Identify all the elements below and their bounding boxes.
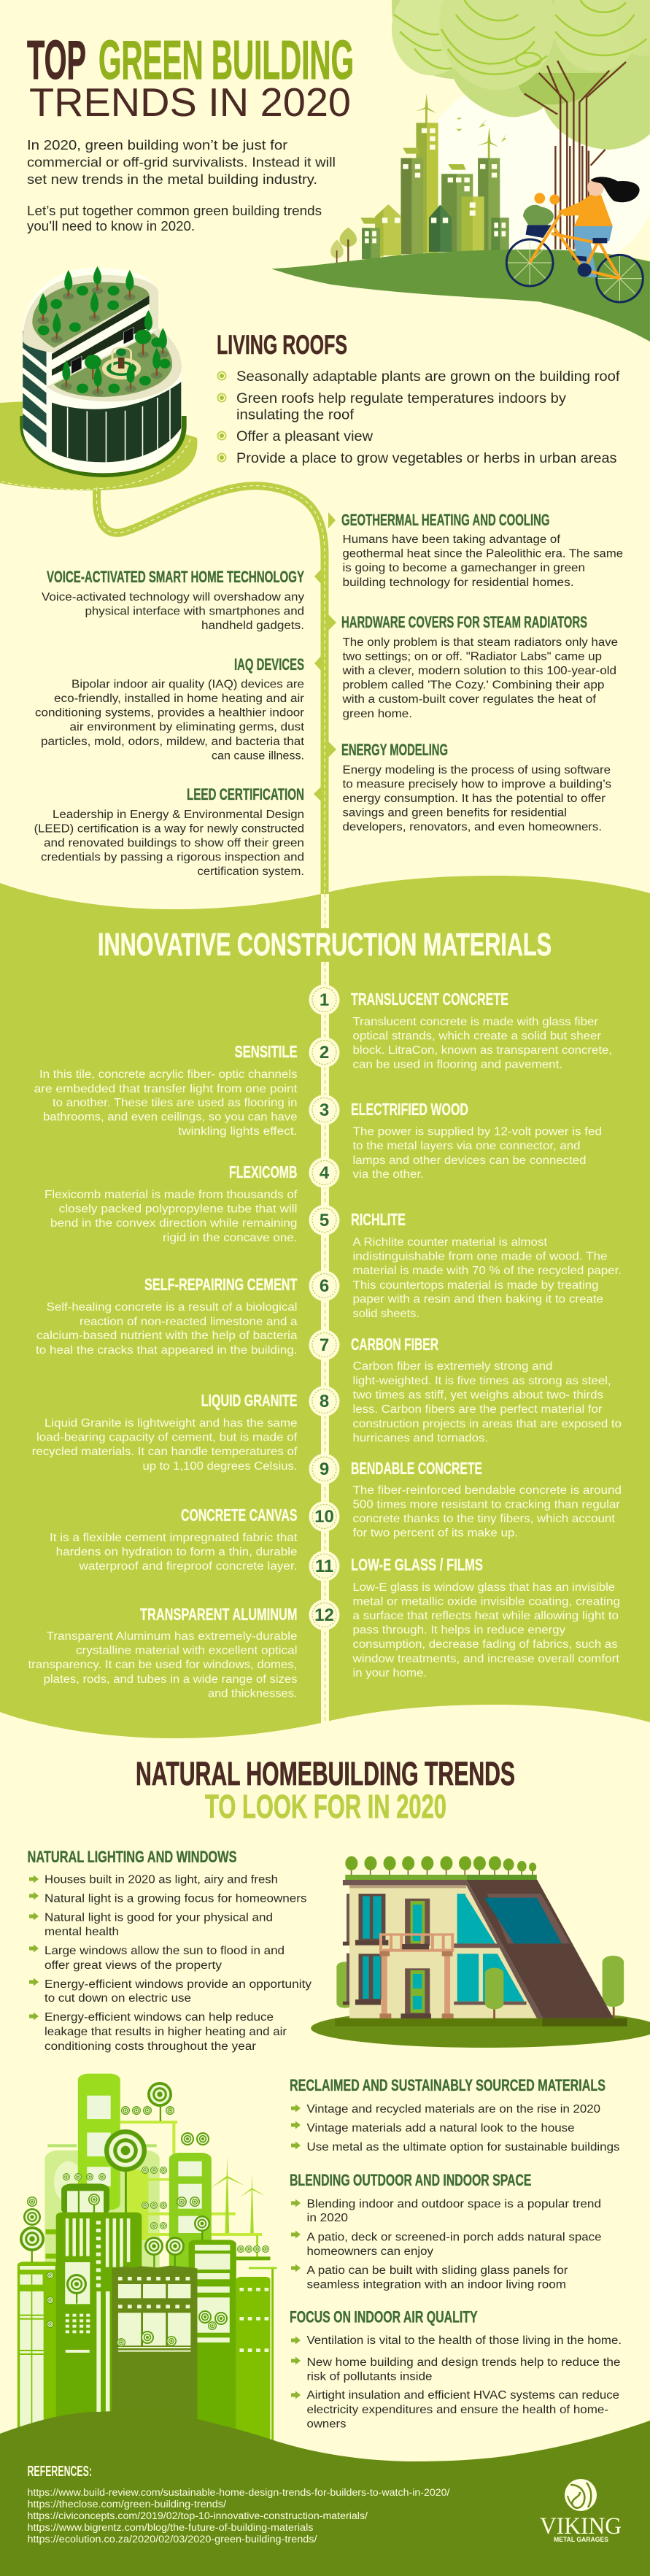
panel: reclaimed and sustainably sourced materials	[290, 2076, 620, 2153]
panel: blending outdoor and indoor space: in 2020	[306, 2212, 348, 2224]
panel: blending outdoor and indoor space: A patio, deck or screened-in porch adds natural space	[306, 2232, 601, 2244]
panel: focus on indoor air quality: electricity expenditures and ensure the health of home-	[306, 2404, 608, 2416]
item: hardware covers for steam radiators: with a clever, modern solution to this 100-year-old	[341, 665, 616, 677]
item: sensitile: twinkling lights effect.	[178, 1125, 298, 1138]
cyclist	[574, 226, 613, 277]
item: richlite	[351, 1210, 622, 1320]
trees and bushes	[37, 288, 169, 396]
panel: natural lighting and windows: Houses built in 2020 as light, airy and fresh	[45, 1874, 278, 1886]
item: self-repairing cement: Self-healing concrete is a result of a biological	[47, 1301, 297, 1314]
road arrow markers	[314, 512, 336, 802]
lower roof	[47, 328, 182, 401]
references: https://ecolution.co.za/2020/02/03/2020-green-building-trends/	[28, 2534, 317, 2545]
item: hardware covers for steam radiators: with a custom-built cover regulates the heat of	[341, 693, 597, 706]
references: https://theclose.com/green-building-trends/	[28, 2499, 226, 2510]
number markers 1-12: 5	[320, 1211, 329, 1230]
item: sensitile: bathrooms, and even ceilings, so you can have	[43, 1111, 298, 1124]
item: low-e glass / films: Low-E glass is window glass that has an invisible	[353, 1581, 615, 1594]
buildings	[416, 123, 427, 253]
item: IAQ devices: Bipolar indoor air quality (IAQ) devices are	[71, 679, 304, 690]
item: hardware covers for steam radiators: The only problem is that steam radiators only have	[343, 636, 618, 649]
item: transparent aluminum: plates, rods, and tubes in a wide range of sizes	[44, 1673, 298, 1686]
panel: natural lighting and windows: to cut down on electric use	[45, 1992, 191, 2005]
tree stems	[31, 2097, 203, 2304]
item: richlite: solid sheets.	[353, 1308, 419, 1320]
bullet list: Seasonally adaptable plants are grown on the building roof	[236, 369, 620, 385]
number markers 1-12: 7	[320, 1335, 329, 1355]
panel: blending outdoor and indoor space: Blending indoor and outdoor space is a popular trend	[306, 2198, 601, 2210]
item: voice-activated smart home technology: handheld gadgets.	[201, 620, 304, 632]
panel: focus on indoor air quality: owners	[306, 2418, 347, 2431]
panel: natural lighting and windows: mental health	[45, 1926, 119, 1938]
item: sensitile: SENSITILE	[235, 1042, 298, 1061]
intro text: In 2020, green building won’t be just for	[27, 137, 287, 153]
number markers 1-12: 4	[320, 1163, 330, 1183]
item: LEED certification: certification system.	[197, 865, 304, 878]
references: https://www.bigrentz.com/blog/the-future-of-building-materials	[28, 2522, 314, 2533]
item: IAQ devices: IAQ DEVICES	[234, 655, 304, 674]
item: transparent aluminum: and thicknesses.	[208, 1687, 298, 1700]
item: low-e glass / films: a surface that reflects heat while allowing light to	[353, 1610, 619, 1622]
bullet list: insulating the roof	[236, 407, 355, 423]
item: low-e glass / films: window treatments, and increase overall comfort	[352, 1653, 620, 1665]
item: IAQ devices: eco-friendly, installed in home heating and air	[54, 693, 304, 705]
illustration: building with living roof	[20, 266, 187, 477]
item: voice-activated smart home technology	[42, 568, 304, 632]
fountain	[102, 358, 141, 379]
item: self-repairing cement: calcium-based nutrient with the help of bacteria	[36, 1330, 298, 1342]
item: liquid granite: up to 1,100 degrees Celsius.	[143, 1460, 298, 1473]
item: carbon fiber: hurricanes and tornados.	[353, 1432, 488, 1445]
item: richlite: This countertops material is made by treating	[353, 1279, 598, 1292]
item: geothermal heating and cooling: geothermal heat since the Paleolithic era. The same	[343, 547, 623, 560]
windows	[457, 1894, 465, 1943]
item: LEED certification	[34, 785, 304, 878]
item: concrete canvas: CONCRETE CANVAS	[181, 1505, 298, 1524]
solar panels	[360, 148, 466, 224]
item: translucent concrete: block. LitraCon, known as transparent concrete,	[353, 1044, 612, 1057]
item: liquid granite: recycled materials. It can handle temperatures of	[32, 1446, 298, 1458]
item: richlite: RICHLITE	[351, 1210, 406, 1229]
wind turbines	[415, 93, 499, 159]
panel: focus on indoor air quality: risk of pollutants inside	[306, 2371, 432, 2383]
item: voice-activated smart home technology: Voice-activated technology will overshadow any	[42, 591, 304, 603]
item: IAQ devices: conditioning systems, provides a healthier indoor	[35, 707, 304, 720]
illustration: tree, green city and cyclist	[271, 0, 650, 342]
heading: natural homebuilding trends	[136, 1755, 515, 1825]
item: translucent concrete: TRANSLUCENT CONCRETE	[351, 990, 508, 1009]
references: REFERENCES:	[28, 2464, 92, 2480]
item: carbon fiber: two times as stiff, yet weighs about two- thirds	[353, 1389, 603, 1401]
item: liquid granite: Liquid Granite is lightweight and has the same	[45, 1417, 298, 1430]
item: bendable concrete: 500 times more resistant to cracking than regular	[353, 1499, 620, 1511]
item: electrified wood: ELECTRIFIED WOOD	[351, 1100, 468, 1119]
number markers 1-12: 1	[320, 990, 329, 1010]
panel: blending outdoor and indoor space: A patio can be built with sliding glass panels for	[306, 2264, 568, 2277]
heading: living roofs: LIVING ROOFS	[217, 330, 347, 360]
panel: footer background	[0, 2411, 650, 2576]
item: energy modeling	[341, 741, 611, 833]
number markers 1-12: 10	[314, 1507, 334, 1527]
item: geothermal heating and cooling: Humans have been taking advantage of	[343, 533, 561, 546]
item: self-repairing cement: SELF-REPAIRING CEMENT	[144, 1275, 298, 1294]
number markers 1-12: 6	[320, 1276, 329, 1296]
panel: blending outdoor and indoor space: BLENDING OUTDOOR AND INDOOR SPACE	[290, 2171, 531, 2189]
title: GREEN BUILDING	[98, 29, 354, 90]
item: energy modeling: developers, renovators, and even homeowners.	[343, 821, 602, 833]
panel: focus on indoor air quality: Airtight insulation and efficient HVAC systems can reduce	[306, 2389, 619, 2402]
item: electrified wood: via the other.	[353, 1168, 424, 1181]
wind turbines	[212, 2156, 266, 2257]
item: electrified wood: lamps and other devices can be connected	[353, 1154, 587, 1167]
item: translucent concrete: Translucent concrete is made with glass fiber	[353, 1016, 598, 1028]
item: geothermal heating and cooling: building technology for residential homes.	[343, 576, 573, 589]
number markers 1-12: 9	[320, 1459, 329, 1479]
panel: natural lighting and windows: Large windows allow the sun to flood in and	[45, 1945, 285, 1957]
item: sensitile: to another. These tiles are used as flooring in	[53, 1097, 298, 1109]
item: carbon fiber: CARBON FIBER	[351, 1335, 438, 1354]
item: sensitile: In this tile, concrete acrylic fiber- optic channels	[39, 1068, 298, 1081]
title	[27, 29, 354, 125]
item: flexicomb: FLEXICOMB	[229, 1162, 298, 1181]
item: LEED certification: credentials by passing a rigorous inspection and	[41, 851, 304, 864]
number markers 1-12	[309, 984, 340, 1630]
panel: natural lighting and windows: leakage that results in higher heating and air	[45, 2026, 287, 2038]
item: geothermal heating and cooling: GEOTHERMAL HEATING AND COOLING	[341, 511, 550, 529]
panel: reclaimed and sustainably sourced materials: Use metal as the ultimate option for sustainable buildings	[306, 2141, 620, 2153]
item: IAQ devices: particles, mold, odors, mildew, and bacteria that	[41, 736, 305, 748]
references	[28, 2464, 450, 2545]
references: https://civiconcepts.com/2019/02/top-10-innovative-construction-materials/	[28, 2510, 368, 2521]
panel: living roofs	[217, 330, 620, 466]
item: electrified wood: The power is supplied by 12-volt power is fed	[353, 1126, 602, 1138]
item: concrete canvas	[50, 1505, 298, 1573]
intro text: you’ll need to know in 2020.	[27, 218, 195, 234]
road from building to first section	[0, 401, 325, 894]
item: liquid granite: LIQUID GRANITE	[201, 1391, 298, 1410]
item: bendable concrete: concrete thanks to the tiny fibers, which account	[353, 1513, 616, 1525]
item: flexicomb: rigid in the concave one.	[163, 1232, 298, 1244]
item: bendable concrete	[351, 1459, 622, 1540]
panel: natural lighting and windows	[28, 1848, 312, 2053]
item: low-e glass / films: LOW-E GLASS / FILMS	[351, 1555, 483, 1574]
number markers 1-12: 3	[320, 1100, 329, 1120]
item: sensitile: are embedded that transfer light from one point	[34, 1083, 298, 1095]
item: low-e glass / films: pass through. It helps in reduce energy	[353, 1624, 565, 1636]
logo: viking metal garages: METAL GARAGES	[554, 2536, 608, 2543]
birds	[456, 117, 508, 142]
item: sensitile	[34, 1042, 298, 1138]
concentric tree tops	[20, 2082, 269, 2347]
item: geothermal heating and cooling	[341, 511, 623, 589]
logo: viking metal garages: VIKING	[540, 2513, 622, 2540]
item: geothermal heating and cooling: is going to become a gamechanger in green	[343, 562, 585, 574]
item: LEED certification: LEED CERTIFICATION	[187, 785, 304, 803]
item: transparent aluminum	[28, 1605, 298, 1700]
bullet list: Offer a pleasant view	[236, 429, 373, 444]
timeline road	[321, 894, 329, 1724]
item: electrified wood: to the metal layers via one connector, and	[353, 1140, 581, 1152]
item: richlite: A Richlite counter material is almost	[353, 1236, 548, 1249]
item: hardware covers for steam radiators	[341, 613, 618, 720]
item: transparent aluminum: transparency. It can be used for windows, domes,	[28, 1659, 297, 1671]
item: hardware covers for steam radiators: two settings; on or off. "Radiator Labs" came up	[343, 651, 602, 663]
intro text	[27, 137, 336, 234]
item: concrete canvas: hardens on hydration to form a thin, durable	[56, 1546, 297, 1559]
panel: blending outdoor and indoor space: homeowners can enjoy	[306, 2245, 433, 2258]
item: electrified wood	[351, 1100, 602, 1181]
illustration: house with green roof	[311, 1856, 650, 2048]
upper roof	[23, 275, 158, 352]
item: self-repairing cement	[36, 1275, 298, 1357]
panel: green background for innovative materials	[0, 876, 650, 1738]
panel: natural lighting and windows: Energy-efficient windows can help reduce	[45, 2011, 274, 2024]
item: concrete canvas: waterproof and fireproof concrete layer.	[78, 1560, 298, 1573]
bicycle	[506, 239, 643, 302]
item: voice-activated smart home technology: VOICE-ACTIVATED SMART HOME TECHNOLOGY	[47, 568, 304, 586]
item: carbon fiber: light-weighted. It is five times as strong as steel,	[353, 1375, 611, 1387]
item: self-repairing cement: reaction of non-reacted limestone and a	[80, 1316, 298, 1328]
item: energy modeling: Energy modeling is the process of using software	[343, 764, 611, 776]
item: IAQ devices: air environment by eliminating germs, dust	[70, 721, 305, 733]
item: transparent aluminum: Transparent Aluminum has extremely-durable	[47, 1630, 297, 1643]
panel: natural lighting and windows: conditioning costs throughout the year	[45, 2040, 256, 2053]
item: richlite: paper with a resin and then baking it to create	[353, 1293, 603, 1306]
item: richlite: material is made with 70 % of the recycled paper.	[353, 1265, 622, 1277]
basket with plant	[523, 205, 554, 225]
item: liquid granite: load-bearing capacity of cement, but is made of	[36, 1432, 298, 1443]
item: translucent concrete: optical strands, which create a solid but sheer	[353, 1030, 601, 1042]
item: energy modeling: to measure precisely how to improve a building’s	[343, 778, 611, 791]
intro text: Let’s put together common green building trends	[27, 203, 322, 218]
trees left of city	[340, 228, 357, 247]
logo: viking metal garages	[540, 2479, 622, 2543]
intro text: set new trends in the metal building industry.	[27, 171, 317, 187]
illustration: bright green city	[18, 2074, 277, 2457]
item: IAQ devices: can cause illness.	[212, 750, 304, 763]
item: bendable concrete: for two percent of its make up.	[353, 1527, 518, 1540]
item: low-e glass / films: metal or metallic oxide invisible coating, creating	[353, 1595, 620, 1608]
item: hardware covers for steam radiators: problem called 'The Cozy.' Combining their app	[343, 679, 604, 692]
icon: viking emblem	[565, 2479, 597, 2511]
item: carbon fiber: Carbon fiber is extremely strong and	[353, 1360, 553, 1373]
item: flexicomb	[45, 1162, 298, 1244]
item: LEED certification: Leadership in Energy & Environmental Design	[53, 809, 304, 821]
panel: natural lighting and windows: Natural light is a growing focus for homeowners	[45, 1893, 307, 1905]
panel: reclaimed and sustainably sourced materials: Vintage materials add a natural look to the house	[306, 2122, 575, 2135]
balcony	[379, 1933, 454, 2018]
item: LEED certification: (LEED) certification is a way for newly constructed	[34, 823, 304, 835]
rooftop trees	[351, 1868, 533, 1875]
bullet list	[217, 369, 620, 466]
number markers 1-12: 12	[314, 1605, 334, 1625]
panel: blending outdoor and indoor space	[290, 2171, 601, 2291]
title: TRENDS IN 2020	[29, 80, 351, 125]
item: flexicomb: closely packed polypropylene tube that will	[59, 1203, 297, 1216]
skylight	[487, 1894, 570, 1943]
item: translucent concrete	[351, 990, 612, 1071]
panel: blending outdoor and indoor space: seamless integration with an indoor living room	[306, 2279, 566, 2291]
panel: natural lighting and windows: Natural light is good for your physical and	[45, 1912, 273, 1924]
item: translucent concrete: can be used in flooring and pavement.	[353, 1058, 562, 1071]
item: transparent aluminum: TRANSPARENT ALUMINUM	[140, 1605, 298, 1624]
panel: focus on indoor air quality	[290, 2308, 622, 2431]
item: low-e glass / films: in your home.	[353, 1667, 427, 1680]
item: low-e glass / films: consumption, decrease fading of fabrics, such as	[353, 1638, 618, 1651]
title: TOP	[27, 29, 86, 90]
item: flexicomb: Flexicomb material is made from thousands of	[45, 1189, 298, 1201]
item: low-e glass / films	[351, 1555, 620, 1680]
panel: reclaimed and sustainably sourced materials: Vintage and recycled materials are on the rise in 2020	[306, 2103, 600, 2116]
item: richlite: indistinguishable from one made of wood. The	[353, 1251, 607, 1262]
intro text: commercial or off-grid survivalists. Instead it will	[27, 155, 336, 169]
item: bendable concrete: The fiber-reinforced bendable concrete is around	[353, 1484, 622, 1497]
panel: natural lighting and windows: NATURAL LIGHTING AND WINDOWS	[28, 1848, 236, 1866]
panel: natural lighting and windows: Energy-efficient windows provide an opportunity	[45, 1978, 312, 1991]
bullet list: Provide a place to grow vegetables or herbs in urban areas	[236, 451, 617, 466]
panel: focus on indoor air quality: Ventilation is vital to the health of those living in the home.	[306, 2334, 622, 2347]
heading: natural homebuilding trends: TO LOOK FOR IN 2020	[205, 1788, 446, 1825]
item: carbon fiber: less. Carbon fibers are the perfect material for	[353, 1403, 603, 1416]
panel: focus on indoor air quality: New home building and design trends help to reduce the	[306, 2356, 620, 2369]
panel: focus on indoor air quality: FOCUS ON INDOOR AIR QUALITY	[290, 2308, 478, 2326]
number markers 1-12: 8	[320, 1392, 329, 1411]
item: bendable concrete: BENDABLE CONCRETE	[351, 1459, 482, 1478]
item: concrete canvas: It is a flexible cement impregnated fabric that	[50, 1532, 298, 1544]
item: energy modeling: energy consumption. It has the potential to offer	[343, 793, 605, 805]
item: energy modeling: savings and green benefits for residential	[343, 807, 567, 819]
panel: natural lighting and windows: offer great views of the property	[45, 1959, 222, 1972]
item: energy modeling: ENERGY MODELING	[341, 741, 448, 759]
item: voice-activated smart home technology: physical interface with smartphones and	[85, 606, 304, 617]
number markers 1-12: 2	[320, 1043, 329, 1063]
item: carbon fiber	[351, 1335, 622, 1445]
number markers 1-12: 11	[315, 1557, 333, 1576]
item: hardware covers for steam radiators: green home.	[343, 708, 412, 720]
item: self-repairing cement: to heal the cracks that appeared in the building.	[36, 1344, 298, 1357]
item: IAQ devices	[35, 655, 305, 763]
item: LEED certification: and renovated buildings to show off their green	[44, 837, 304, 849]
item: liquid granite	[32, 1391, 298, 1473]
item: carbon fiber: construction projects in areas that are exposed to	[353, 1418, 622, 1430]
item: transparent aluminum: crystalline material with excellent optical	[76, 1645, 298, 1657]
references: https://www.build-review.com/sustainable-home-design-trends-for-builders-to-watch-in-2020/	[28, 2487, 450, 2498]
bullet list: Green roofs help regulate temperatures indoors by	[236, 391, 567, 406]
hill	[271, 250, 650, 342]
item: flexicomb: bend in the convex direction while remaining	[50, 1217, 298, 1230]
